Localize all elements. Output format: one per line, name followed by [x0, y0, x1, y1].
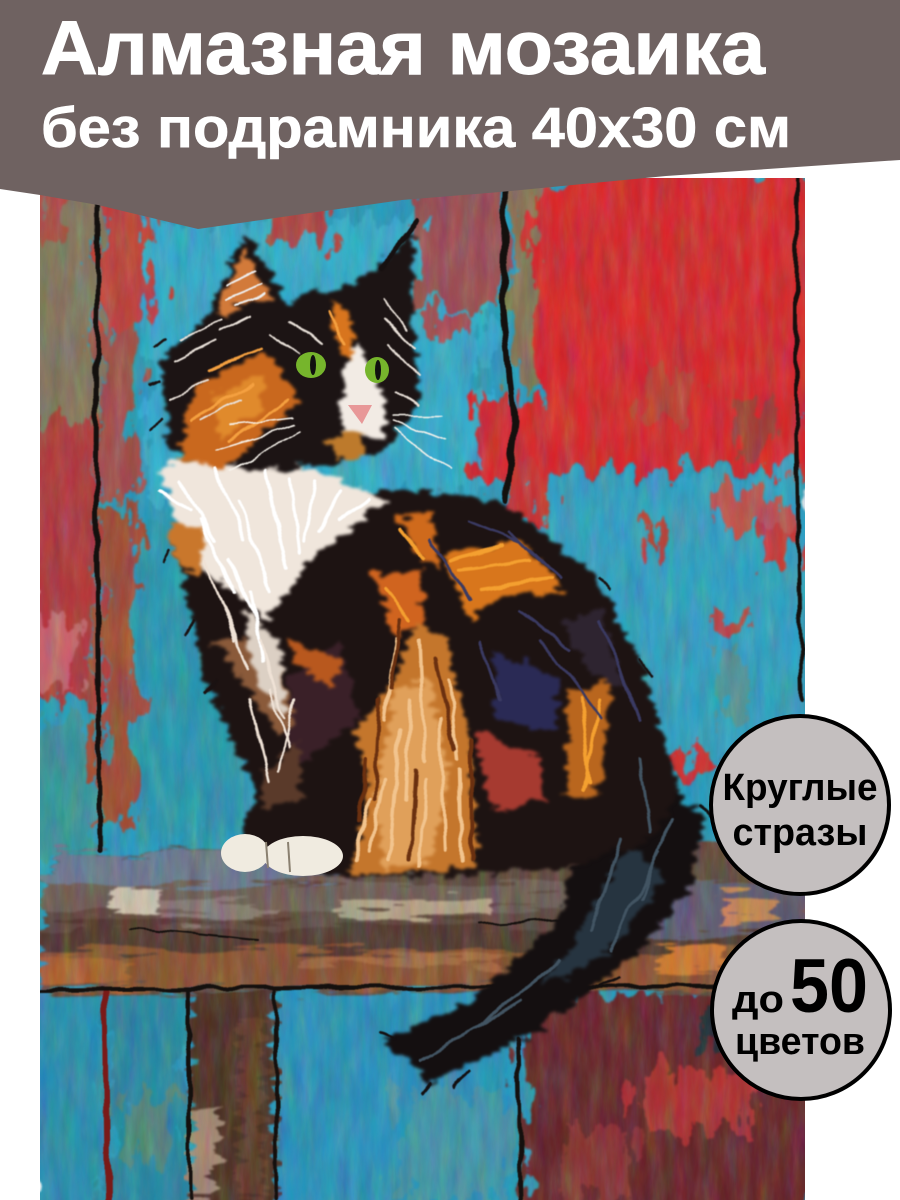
wooden post [192, 990, 274, 1200]
wooden shelf [40, 842, 815, 992]
cat white chest [158, 440, 390, 720]
plank cracks [40, 178, 810, 1200]
header banner [0, 0, 900, 229]
lower planks [20, 990, 815, 1200]
cat [150, 220, 712, 1095]
cat body [175, 490, 680, 878]
badge: up to 50 colours: цветов [735, 1021, 865, 1063]
badge: round rhinestones [711, 716, 889, 894]
banner shape [0, 0, 900, 229]
badge: round rhinestones: стразы [732, 812, 868, 854]
cat white paws [221, 834, 343, 876]
cat fur strokes and whiskers [150, 220, 712, 1095]
cat tail [382, 790, 708, 1088]
painting: calico cat on a wooden shelf [20, 160, 820, 1200]
badge: up to 50 colours: 50 [790, 944, 868, 1029]
badge: up to 50 colours: до [732, 979, 784, 1021]
background: painted wooden planks [20, 160, 820, 1200]
badge: round rhinestones: Круглые [722, 767, 878, 809]
cat eyes and nose [296, 352, 389, 424]
subtitle: без подрамника 40х30 см [41, 96, 791, 160]
title: Алмазная мозаика [41, 6, 766, 91]
painterly texture overlays [40, 178, 805, 1200]
badge: up to 50 colours [712, 921, 890, 1099]
cat head and ears [160, 232, 420, 470]
